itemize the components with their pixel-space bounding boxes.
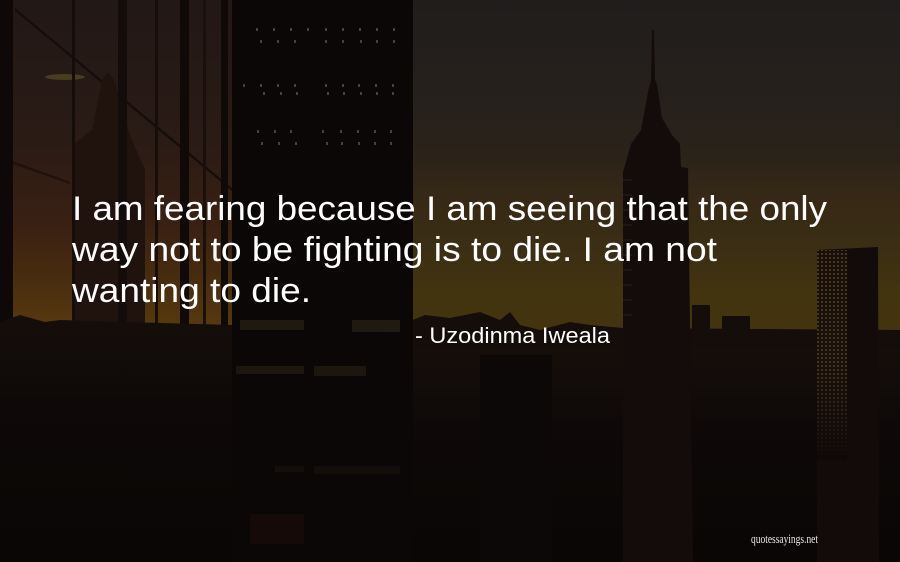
quote text [71,190,827,310]
quote line 2: way not to be fighting is to die. I am not [71,231,718,269]
attribution: - Uzodinma Iweala [415,323,611,348]
background: city skyline silhouettes [413,305,900,562]
watermark: quotessayings.net [751,531,818,546]
background: reflective window panel [0,0,232,562]
background: dark building with lit windows [232,0,413,562]
background: right skyscraper [817,247,879,562]
background: lower city darkness [0,315,900,562]
background: Empire State style tower [623,30,693,562]
quote line 1: I am fearing because I am seeing that the only [72,190,827,228]
quote line 3: wanting to die. [71,272,311,310]
